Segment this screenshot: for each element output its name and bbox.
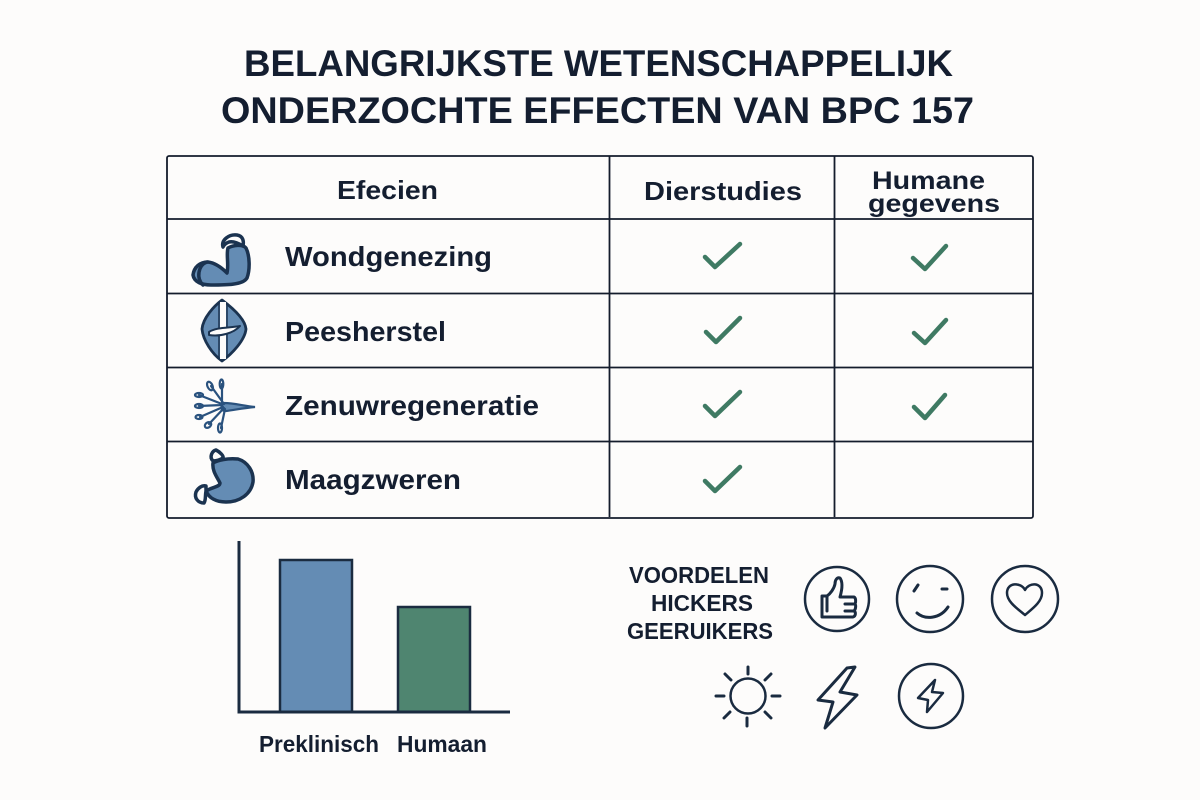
check marks <box>705 244 946 491</box>
icon: bolt in circle <box>899 664 963 728</box>
icon: smiley <box>897 566 963 632</box>
bar chart <box>239 541 510 757</box>
title: ONDERZOCHTE EFFECTEN VAN BPC 157 <box>221 90 974 131</box>
title <box>221 43 974 131</box>
icon: sun <box>716 667 780 726</box>
benefits heading <box>627 562 773 644</box>
icon: tendon <box>202 300 246 361</box>
title: BELANGRIJKSTE WETENSCHAPPELIJK <box>244 43 953 84</box>
column header: Dierstudies: Dierstudies <box>644 176 802 206</box>
bar: Preklinisch <box>280 560 352 712</box>
column header: Humane gegevens <box>868 167 1000 218</box>
benefit icons <box>716 566 1058 728</box>
benefits heading: VOORDELEN <box>629 562 769 588</box>
table grid <box>167 156 1033 518</box>
row label: Maagzweren: Maagzweren <box>285 464 461 495</box>
row label: Peesherstel: Peesherstel <box>285 316 446 347</box>
icon: thumbs up <box>805 567 869 631</box>
column header: Humane gegevens: Humane <box>872 167 985 195</box>
icon: heart <box>992 566 1058 632</box>
row label: Zenuwregeneratie: Zenuwregeneratie <box>285 390 539 421</box>
benefits heading: HICKERS <box>651 590 753 616</box>
axes <box>239 541 510 712</box>
axis label: Preklinisch: Preklinisch <box>259 731 379 757</box>
axis label: Humaan: Humaan <box>397 731 487 757</box>
icon: stomach <box>195 450 253 503</box>
column header: Efecien: Efecien <box>337 175 438 205</box>
row label: Wondgenezing: Wondgenezing <box>285 241 492 272</box>
bar: Humaan <box>398 607 470 712</box>
icon: muscle arm <box>193 235 249 285</box>
column header: Humane gegevens: gegevens <box>868 190 1000 218</box>
benefits heading: GEERUIKERS <box>627 618 773 644</box>
icon: lightning bolt <box>818 667 857 728</box>
icon: nerve <box>195 380 255 432</box>
table <box>167 156 1033 518</box>
